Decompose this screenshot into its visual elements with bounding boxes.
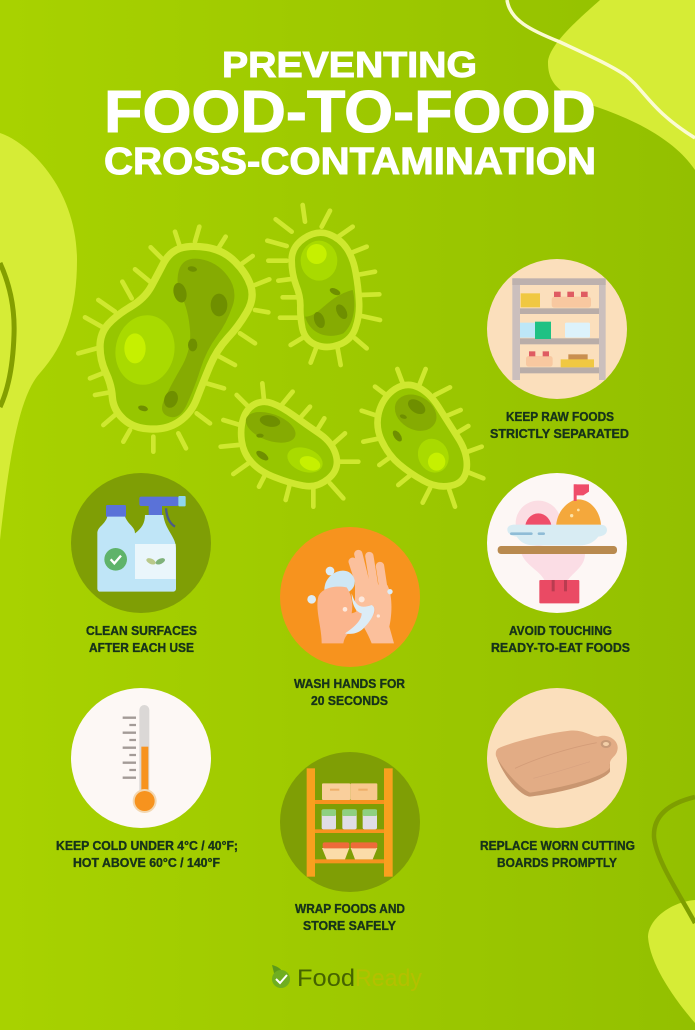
label: STORE SAFELY — [303, 919, 397, 933]
blob: bottom right — [648, 900, 695, 1023]
step: clean surfaces — [71, 473, 211, 655]
label: STRICTLY SEPARATED — [490, 427, 629, 441]
label: 20 SECONDS — [311, 694, 388, 708]
bacterium: top — [267, 205, 380, 365]
icon: serving tray — [487, 473, 627, 613]
label — [295, 902, 405, 933]
logo: FoodReady: Ready — [355, 965, 422, 992]
step: keep temperatures — [56, 688, 238, 870]
logo: FoodReady — [272, 965, 422, 992]
label: KEEP COLD UNDER 4°C / 40°F; — [56, 839, 238, 853]
bacterium: large — [78, 227, 269, 452]
icon: storage rack — [280, 752, 420, 892]
title: CROSS-CONTAMINATION — [104, 141, 596, 183]
title — [104, 44, 596, 183]
label: REPLACE WORN CUTTING — [480, 839, 635, 853]
label: CLEAN SURFACES — [86, 624, 197, 638]
icon: cutting board — [487, 688, 627, 828]
label: AFTER EACH USE — [89, 641, 194, 655]
curve line: top right — [507, 0, 695, 138]
step: wash hands — [280, 527, 420, 708]
blob: left — [0, 133, 77, 540]
blob: top right — [548, 0, 695, 170]
label — [294, 677, 405, 708]
label: AVOID TOUCHING — [509, 624, 612, 638]
curve line: bottom right — [654, 797, 695, 923]
icon: cleaning bottles — [71, 473, 211, 613]
bacterium: bottom right — [362, 369, 483, 507]
icon: soapy hands — [280, 527, 420, 667]
label — [56, 839, 238, 870]
step: wrap and store — [280, 752, 420, 933]
label: KEEP RAW FOODS — [506, 410, 614, 424]
icon: thermometer — [71, 688, 211, 828]
label: READY-TO-EAT FOODS — [491, 641, 630, 655]
label: WRAP FOODS AND — [295, 902, 405, 916]
title: PREVENTING — [222, 44, 477, 85]
title: FOOD-TO-FOOD — [104, 79, 596, 145]
illustration: bacteria cluster — [78, 205, 483, 507]
curve line: left — [0, 263, 14, 407]
step: replace worn cutting boards — [480, 688, 635, 870]
bacterium: bottom middle — [221, 383, 358, 507]
label — [490, 410, 629, 441]
label: HOT ABOVE 60°C / 140°F — [73, 856, 220, 870]
label: BOARDS PROMPTLY — [497, 856, 618, 870]
label — [480, 839, 635, 870]
step: keep raw foods separated — [487, 259, 629, 441]
step: avoid touching ready-to-eat foods — [487, 473, 630, 655]
label: WASH HANDS FOR — [294, 677, 405, 691]
icon: leaf check — [272, 965, 290, 988]
label — [491, 624, 630, 655]
logo: FoodReady: Food — [297, 965, 355, 992]
icon: refrigerator shelves — [487, 259, 627, 399]
label — [86, 624, 197, 655]
